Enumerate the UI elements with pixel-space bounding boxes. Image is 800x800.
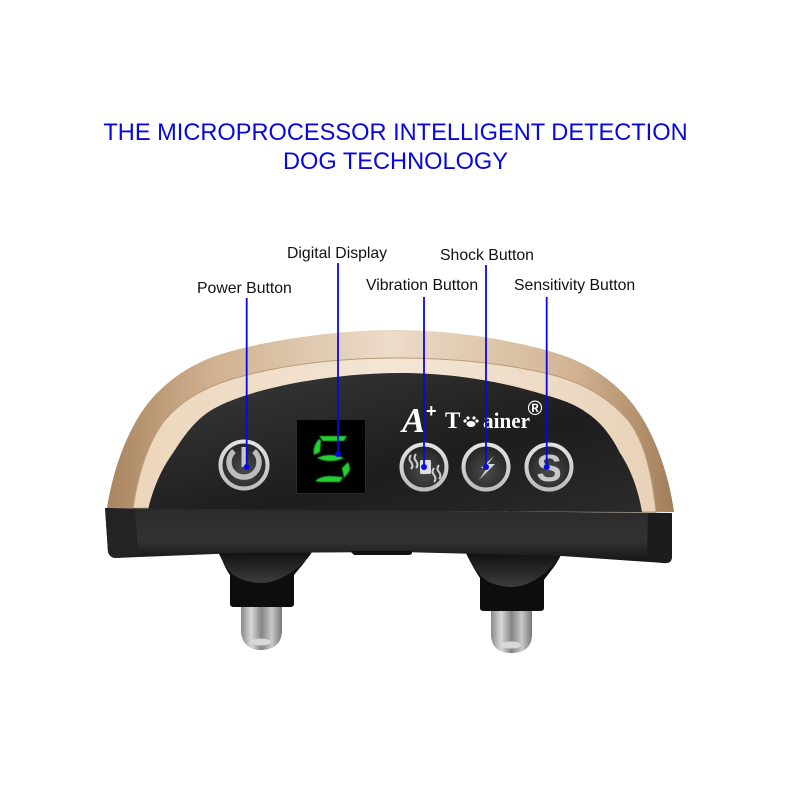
title bbox=[103, 120, 688, 174]
title: DOG TECHNOLOGY bbox=[283, 148, 508, 174]
logo bbox=[400, 398, 543, 440]
logo: T bbox=[445, 408, 460, 433]
probe: right bbox=[466, 553, 562, 653]
display bbox=[296, 420, 366, 494]
power button bbox=[220, 442, 268, 488]
logo: + bbox=[426, 401, 437, 421]
sensitivity button: S bbox=[536, 448, 562, 490]
shell: light rim bbox=[133, 358, 656, 512]
label: Shock Button: Shock Button bbox=[440, 247, 534, 264]
shock button bbox=[464, 444, 508, 490]
label: Digital Display: Digital Display bbox=[287, 245, 387, 262]
shell: gold outer bbox=[107, 330, 674, 512]
base bbox=[105, 508, 672, 563]
logo: ® bbox=[528, 398, 543, 420]
title: THE MICROPROCESSOR INTELLIGENT DETECTION bbox=[103, 120, 688, 146]
digit 5 bbox=[314, 436, 350, 482]
icon: paw bbox=[463, 416, 479, 427]
vibration button bbox=[402, 444, 446, 490]
black panel bbox=[148, 373, 642, 512]
callout lines bbox=[244, 263, 550, 470]
base corners bbox=[105, 508, 138, 558]
label: Vibration Button: Vibration Button bbox=[366, 277, 478, 294]
label: Sensitivity Button: Sensitivity Button bbox=[514, 277, 635, 294]
logo: A bbox=[400, 401, 425, 440]
sensitivity button bbox=[526, 444, 572, 490]
logo: ainer bbox=[483, 408, 530, 433]
probe: left bbox=[218, 550, 312, 650]
label: Power Button: Power Button bbox=[197, 280, 292, 297]
